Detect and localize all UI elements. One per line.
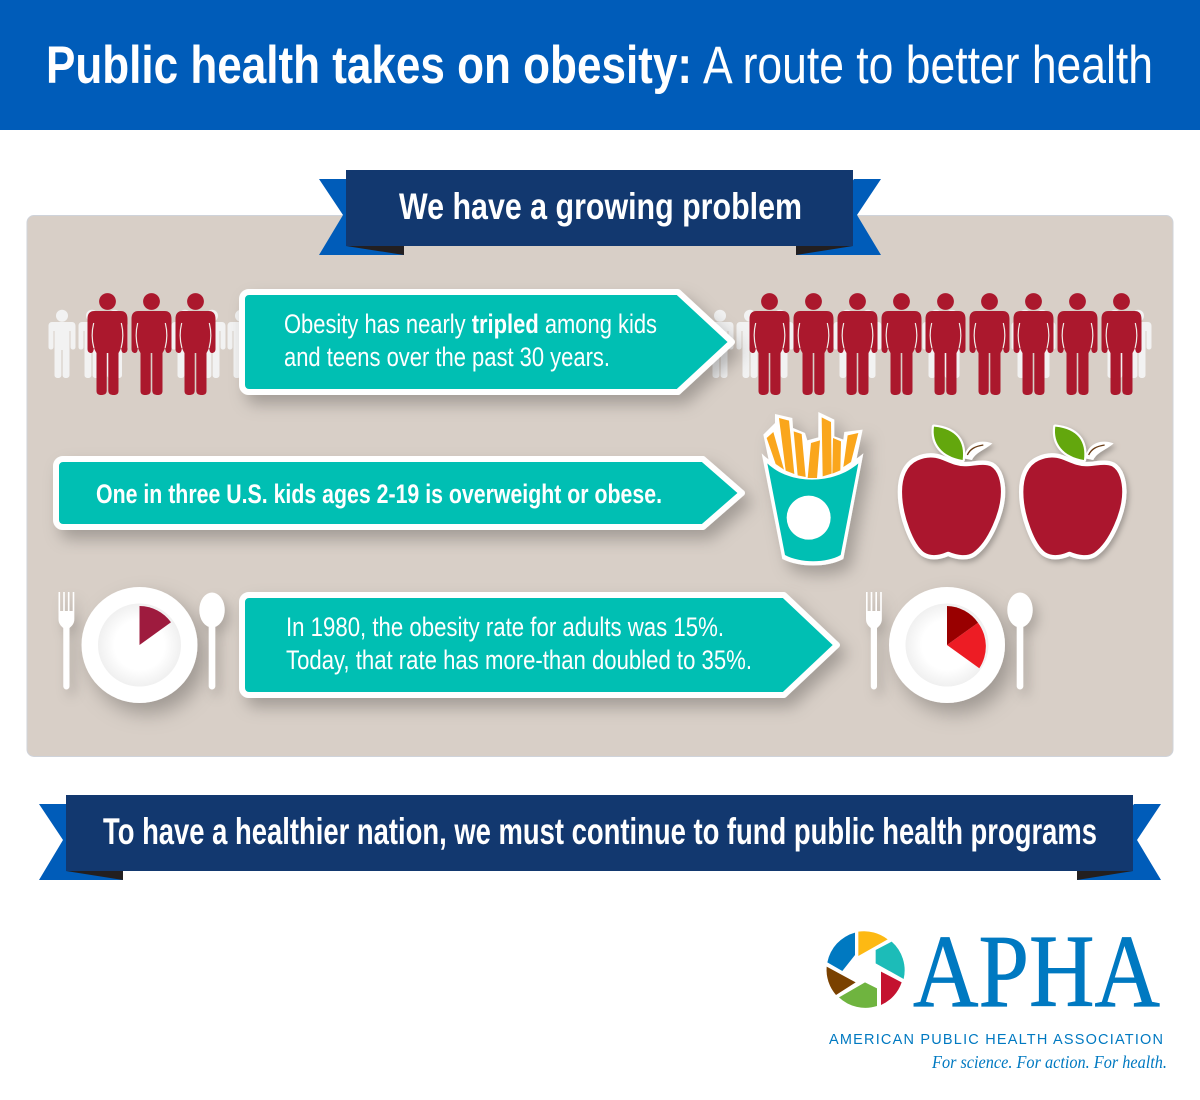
place setting: 15 percent xyxy=(58,587,225,703)
logo wordmark: APHA xyxy=(913,914,1160,1029)
callout text line 2: and teens over the past 30 years. xyxy=(284,342,610,372)
icon: apple two xyxy=(1021,427,1124,557)
callout text line 2: Today, that rate has more-than doubled to 35%. xyxy=(286,645,752,675)
arrow callout: tripled xyxy=(242,292,732,392)
banner heading: We have a growing problem xyxy=(399,186,802,227)
people: after, right group xyxy=(706,293,1152,395)
panel: growing problem background xyxy=(27,216,1173,756)
tagline: For science. For action. For health. xyxy=(931,1052,1167,1072)
title bold part: Public health takes on obesity: xyxy=(46,36,692,95)
banner: healthier nation xyxy=(39,795,1161,880)
logo: APHA xyxy=(827,914,1167,1072)
header band xyxy=(0,0,1200,130)
people: before, left group xyxy=(48,293,254,395)
callout text line 1: In 1980, the obesity rate for adults was 15%. xyxy=(286,612,724,642)
logo mark xyxy=(827,931,905,1008)
icon: apple one xyxy=(900,427,1003,557)
banner: we have a growing problem xyxy=(319,170,881,255)
icon: french fries xyxy=(762,412,863,565)
callout text: One in three U.S. kids ages 2-19 is overweight or obese. xyxy=(96,479,662,509)
place setting: 35 percent xyxy=(866,587,1033,703)
callout text line 1: Obesity has nearly tripled among kids xyxy=(284,309,657,339)
arrow callout: one in three xyxy=(56,459,742,527)
organization name: AMERICAN PUBLIC HEALTH ASSOCIATION xyxy=(829,1032,1163,1048)
arrow callout: adult obesity rate xyxy=(242,595,837,695)
